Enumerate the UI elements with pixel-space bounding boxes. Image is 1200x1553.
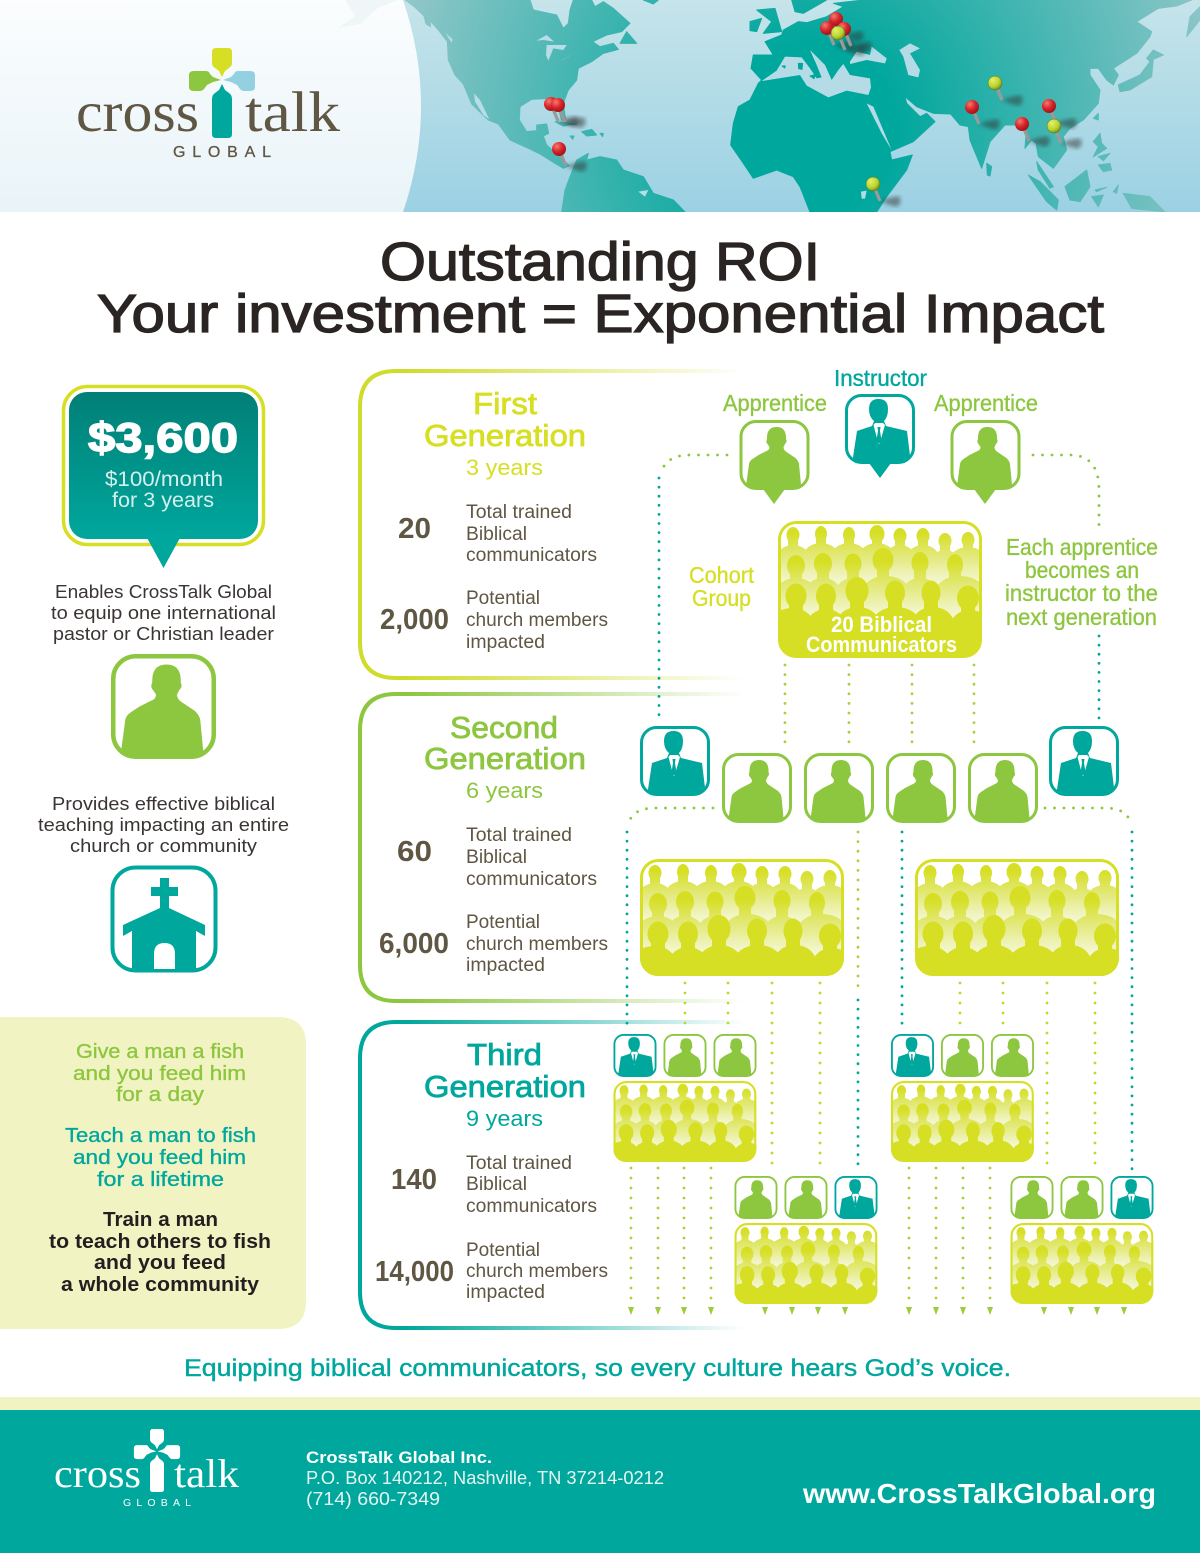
panel: first generation: Generation [424,418,586,453]
panel: first generation: Total trained [466,502,572,523]
panel: third generation [360,1022,745,1328]
panel: second generation: 6 years [466,778,543,803]
text: provides biblical teaching: church or community [70,836,257,856]
panel: third generation: Total trained [466,1153,572,1174]
panel: third generation: 140 [391,1164,437,1196]
title: Your investment = Exponential Impact [97,284,1104,344]
footer address: (714) 660-7349 [306,1489,440,1509]
note: each apprentice becomes an instructor: Each apprentice [1006,534,1158,560]
panel: third generation: impacted [466,1282,545,1303]
panel: fishing proverb: a whole community [61,1274,260,1296]
logo: CrossTalk Global [76,48,341,161]
callout: $3,600 speech bubble: for 3 years [112,489,214,512]
panel: third generation: Biblical [466,1174,527,1195]
panel: third generation: church members [466,1261,608,1282]
text: enables CrossTalk Global: pastor or Christian leader [53,624,274,644]
note: each apprentice becomes an instructor [1005,534,1158,630]
footer address: P.O. Box 140212, Nashville, TN 37214-0212 [306,1468,664,1488]
panel: fishing proverb: Train a man [103,1209,218,1231]
third generation: people and cohorts, group C [885,1034,1039,1166]
panel: fishing proverb: to teach others to fish [49,1231,271,1253]
panel: first generation [360,371,745,678]
panel: third generation: communicators [466,1196,597,1217]
panel: second generation: communicators [466,869,597,890]
first generation: instructor and apprentices [723,365,1038,504]
panel: fishing proverb: Give a man a fish [76,1041,244,1063]
callout: $3,600 speech bubble: $3,600 [88,414,238,461]
panel: first generation: church members [466,610,608,631]
cohort group: 20 biblical communicators: Communicators [806,632,957,657]
footer address [306,1448,664,1509]
text: enables CrossTalk Global [51,582,276,644]
panel: third generation: Third [467,1037,542,1072]
footer [0,1397,1200,1553]
panel: fishing proverb: and you feed him [73,1063,246,1085]
first generation: instructor and apprentices: Apprentice [723,390,827,416]
panel: second generation: 60 [397,836,432,868]
label: cohort group: Cohort [689,562,755,588]
panel: first generation: 3 years [466,455,543,480]
panel: first generation: Biblical [466,524,527,545]
panel: first generation: First [473,386,537,421]
panel: second generation: Potential [466,912,540,933]
panel: second generation [360,694,745,1001]
logo: CrossTalk Global: talk [245,81,341,144]
map: Asia [949,0,1200,212]
cohort group: 20 biblical communicators [770,521,990,658]
panel: second generation: church members [466,934,608,955]
text: enables CrossTalk Global: Enables CrossTalk Global [55,582,272,602]
map pins [544,12,1082,207]
panel: third generation: 14,000 [375,1256,454,1288]
panel: fishing proverb: for a lifetime [97,1169,224,1191]
second generation: people and cohorts [632,726,1127,982]
panel: first generation: communicators [466,545,597,566]
map: Europe and Africa [731,0,950,212]
third generation: people and cohorts, group B [729,1176,883,1308]
callout: $3,600 speech bubble [64,386,264,568]
footer logo: cross [54,1451,141,1496]
note: each apprentice becomes an instructor: next generation [1006,604,1157,630]
cohort group: 20 biblical communicators: 20 Biblical [831,612,932,637]
footer logo [54,1429,239,1509]
panel: fishing proverb: and you feed him [73,1147,246,1169]
panel: second generation: Biblical [466,847,527,868]
text: provides biblical teaching [38,794,289,856]
footer logo: talk [174,1451,239,1496]
third generation: people and cohorts, group A [608,1034,762,1166]
text: provides biblical teaching: teaching impacting an entire [38,815,289,835]
panel: fishing proverb: Teach a man to fish [65,1125,256,1147]
panel: first generation: 2,000 [380,604,449,636]
footer address: CrossTalk Global Inc. [306,1448,492,1467]
logo: CrossTalk Global: cross [76,81,199,144]
label: cohort group: Group [692,585,751,611]
panel: second generation: Generation [424,741,586,776]
footer website: www.CrossTalkGlobal.org [802,1478,1156,1509]
tagline: Equipping biblical communicators, so every culture hears God’s voice. [184,1355,1011,1382]
panel: first generation: Potential [466,588,540,609]
panel: fishing proverb [0,1017,306,1329]
first generation: instructor and apprentices: Instructor [834,365,927,391]
third generation: people and cohorts, group D [1005,1176,1159,1308]
logo: CrossTalk Global: GLOBAL [173,144,271,161]
panel: fishing proverb: for a day [116,1084,204,1106]
panel: fishing proverb: and you feed [94,1252,226,1274]
panel: third generation: Generation [424,1069,586,1104]
text: enables CrossTalk Global: to equip one international [51,603,276,623]
panel: second generation: 6,000 [379,928,449,960]
panel: first generation: impacted [466,632,545,653]
header map banner [0,0,1200,212]
panel: second generation: impacted [466,955,545,976]
panel: second generation: Second [450,710,558,745]
note: each apprentice becomes an instructor: instructor to the [1005,580,1158,606]
map: Americas [405,0,685,212]
footer logo: GLOBAL [123,1497,191,1509]
arrowheads at the bottom of the tree [628,1307,1127,1315]
note: each apprentice becomes an instructor: becomes an [1025,557,1139,583]
text: provides biblical teaching: Provides effective biblical [52,794,275,814]
title: Outstanding ROI [380,232,820,292]
callout: $3,600 speech bubble: $100/month [105,468,223,491]
label: cohort group [689,562,755,611]
panel: third generation: Potential [466,1240,540,1261]
panel: second generation: Total trained [466,825,572,846]
first generation: instructor and apprentices: Apprentice [934,390,1038,416]
title [97,232,1104,344]
icon: pastor [111,654,216,759]
dotted connector lines [627,455,1132,1302]
panel: third generation: 9 years [466,1106,543,1131]
panel: first generation: 20 [398,513,431,545]
icon: church [112,868,216,970]
